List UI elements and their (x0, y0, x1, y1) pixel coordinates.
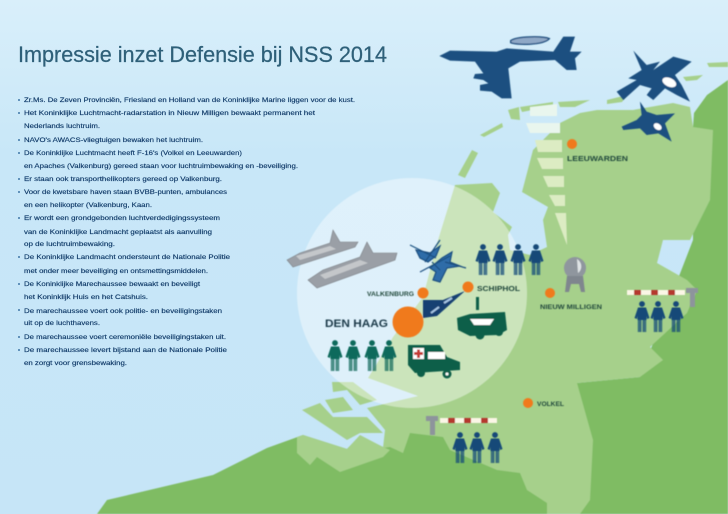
bullet list: Er staan ook transporthelikopters gereed op Valkenburg. (24, 177, 222, 183)
title: Impressie inzet Defensie bij NSS 2014 (18, 42, 387, 67)
bullet list: met onder meer beveiliging en ontsmettingsmiddelen. (24, 269, 208, 275)
label: Leeuwarden: LEEUWARDEN (567, 156, 628, 163)
bullet list: De marechaussee voert ook politie- en beveiligingstaken (24, 309, 222, 315)
icon: airspace triangle between Den Haag and Schiphol (423, 291, 465, 318)
map (97, 62, 728, 514)
map: Germany (560, 80, 728, 514)
bullet list: Er wordt een grondgebonden luchtverdedigingssysteem (24, 216, 220, 222)
bullet list: De Koninklijke Luchtmacht heeft F-16's (Volkel en Leeuwarden) (24, 151, 242, 157)
label: Den Haag: DEN HAAG (325, 318, 388, 330)
map: Netherlands land (367, 103, 713, 514)
bullet list: Het Koninklijke Luchtmacht-radarstation in Nieuw Milligen bewaakt permanent het (24, 111, 315, 117)
map: Wadden islands (458, 62, 728, 178)
highlighted circle around Randstad (297, 178, 527, 408)
icon: green soldiers near Den Haag (328, 340, 396, 371)
bullet list: en een helikopter (Valkenburg, Kaan. (24, 203, 152, 209)
bullet list: De marechaussee levert bijstand aan de Nationale Politie (24, 348, 228, 354)
bullet list: Voor de kwetsbare haven staan BVBB-punten, ambulances (24, 190, 227, 196)
bullet list: het Koninklijk Huis en het Catshuis. (24, 295, 148, 301)
bullet list: De Koninklijke Marechaussee bewaakt en beveiligt (24, 282, 200, 288)
location dot: Leeuwarden (567, 139, 577, 149)
flight path stripes (526, 104, 567, 245)
icon: eastern border barrier (627, 288, 698, 307)
bullet list: Nederlands luchtruim. (24, 124, 100, 130)
label: Volkel: VOLKEL (537, 401, 564, 408)
bullet list: en zorgt voor grensbewaking. (24, 361, 127, 367)
location dot: Den Haag (392, 306, 424, 338)
bullet list: De marechaussee voert ceremoniële beveiligingstaken uit. (24, 335, 226, 341)
location dot: Nieuw Milligen (545, 288, 555, 298)
label: Nieuw Milligen: NIEUW MILLIGEN (540, 304, 602, 311)
icon: F-16 fighter small (622, 102, 675, 142)
icon: southern border barrier (426, 416, 497, 435)
icon: AWACS aircraft (439, 37, 582, 98)
location dot: Valkenburg (418, 288, 428, 298)
icons (287, 37, 698, 463)
bullet list: en Apaches (Valkenburg) gereed staan voor luchtruimbewaking en -beveiliging. (24, 164, 298, 170)
bullet list (18, 98, 355, 367)
label: Schiphol: SCHIPHOL (477, 284, 520, 293)
icon: radar (564, 257, 586, 292)
icon: blue soldiers at eastern border (634, 301, 684, 332)
map: Belgium (97, 420, 600, 514)
bullet list: Zr.Ms. De Zeven Provinciën, Friesland en Holland van de Koninklijke Marine liggen voor de kust. (24, 98, 355, 104)
icon: blue soldiers near Schiphol (476, 244, 544, 275)
location dot: Volkel (523, 398, 533, 408)
bullet list: op de luchtruimbewaking. (24, 242, 115, 248)
location dot: Schiphol (462, 282, 474, 292)
label: Valkenburg: VALKENBURG (367, 291, 414, 298)
bullet list: De Koninklijke Landmacht ondersteunt de Nationale Politie (24, 255, 231, 261)
place labels (325, 156, 628, 408)
icon: blue soldiers at southern border (452, 432, 502, 463)
bullet list: uit op de luchthavens. (24, 321, 100, 327)
bullets markers (18, 99, 20, 351)
icon: ambulance (408, 345, 460, 378)
icon: frigates (287, 230, 397, 288)
icon: military jeep (457, 297, 507, 340)
bullet list: van de Koninklijke Landmacht geplaatst als aanvulling (24, 230, 212, 236)
map: Zeeland islands (302, 382, 383, 440)
icon: F-16 fighter large (617, 51, 692, 102)
bullet list: NAVO's AWACS-vliegtuigen bewaken het luchtruim. (24, 138, 203, 144)
icon: helicopters (410, 240, 466, 282)
map: Zeeuws-Vlaanderen (297, 435, 390, 472)
